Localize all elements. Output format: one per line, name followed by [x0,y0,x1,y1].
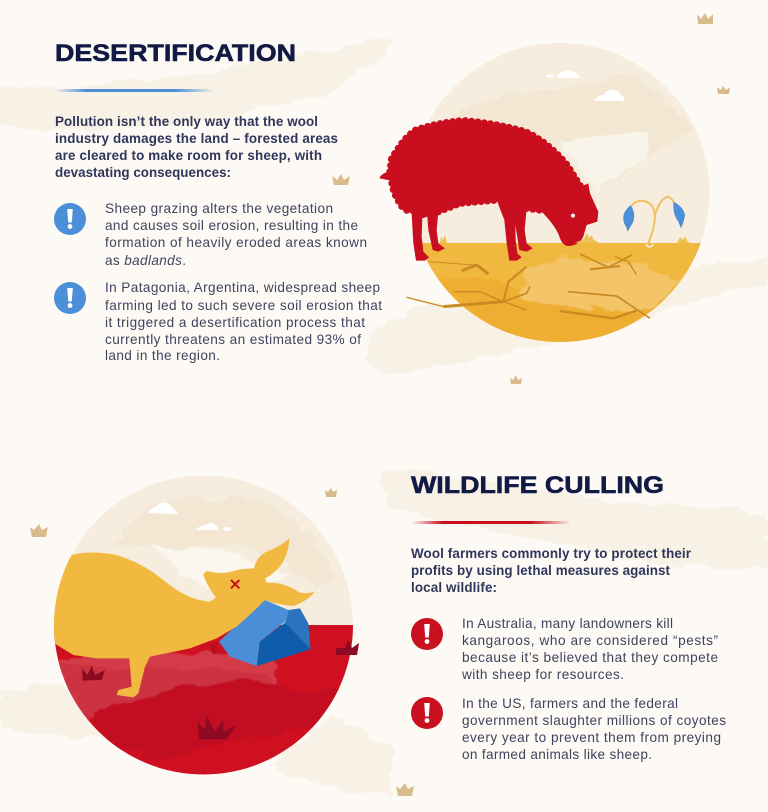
intro text: desertification: Pollution isn’t the only way that the wool [55,114,318,129]
dry grass tufts [440,233,690,243]
rock [219,600,311,666]
bullet text: australia: In Australia, many landowners kill [462,616,673,631]
bullet text: patagonia: farming led to such severe soil erosion that [105,298,382,313]
intro text: wildlife culling: Wool farmers commonly try to protect their [411,546,692,561]
red ground [50,625,360,780]
bullet text: patagonia [105,280,382,363]
icon: blue exclamation 1 [54,203,86,235]
bullet text: patagonia: it triggered a desertification process that [105,315,365,330]
bullet text: patagonia: land in the region. [105,348,220,363]
intro text: wildlife culling [411,546,692,595]
bullet text: australia: with sheep for resources. [461,667,624,682]
ground [422,243,701,342]
bullet text: sheep grazing: Sheep grazing alters the vegetation [105,201,333,216]
heading: wildlife culling: WILDLIFE CULLING [411,472,664,499]
cloud: tiny [546,74,554,78]
bullet text: sheep grazing: and causes soil erosion, resulting in the [105,218,358,233]
intro text: desertification: industry damages the land – forested areas [55,131,338,146]
wilted flower [623,197,685,247]
bullet text: australia [461,616,718,682]
intro text: desertification: are cleared to make room for sheep, with [55,148,322,163]
bullet text: us coyotes: government slaughter millions of coyotes [462,713,726,728]
icon: red exclamation 2 [411,697,443,729]
ground cracks [407,254,650,318]
heading: desertification: DESERTIFICATION [55,40,296,67]
bullet text: us coyotes [462,696,726,762]
bullet text: australia: kangaroos, who are considered “pests” [462,633,718,648]
bullet text: australia: because it’s believed that they compete [462,650,718,665]
cloud: large [594,90,624,101]
illustration: desert circle with sheep [379,43,720,353]
icon: red exclamation 1 [411,618,443,650]
bullet text: patagonia: In Patagonia, Argentina, widespread sheep [105,280,380,295]
intro text: wildlife culling: local wildlife: [411,580,497,595]
bullet text: sheep grazing: formation of heavily eroded areas known [105,235,367,250]
heading rule: red [411,521,571,524]
bullet text: sheep grazing: as badlands. [105,253,186,268]
intro text: wildlife culling: profits by using lethal measures against [411,563,671,578]
bullet text: sheep grazing [105,201,367,268]
bullet text: patagonia: currently threatens an estimated 93% of [105,332,361,347]
heading rule: blue [55,89,215,92]
clouds [148,502,178,514]
kangaroo [50,538,315,739]
bullet text: us coyotes: In the US, farmers and the federal [462,696,678,711]
sky brush [440,73,697,190]
tuft: right edge of circle [336,640,359,655]
red tufts [82,666,236,739]
sky brush [115,498,335,592]
sheep [379,121,598,261]
cloud: small [556,71,581,78]
illustration: kangaroo circle [50,476,360,780]
icon: blue exclamation 2 [54,282,86,314]
intro text: desertification [55,114,338,180]
intro text: desertification: devastating consequences: [55,165,231,180]
bullet text: us coyotes: every year to prevent them from preying [462,730,721,745]
bullet text: us coyotes: on farmed animals like sheep. [462,747,652,762]
